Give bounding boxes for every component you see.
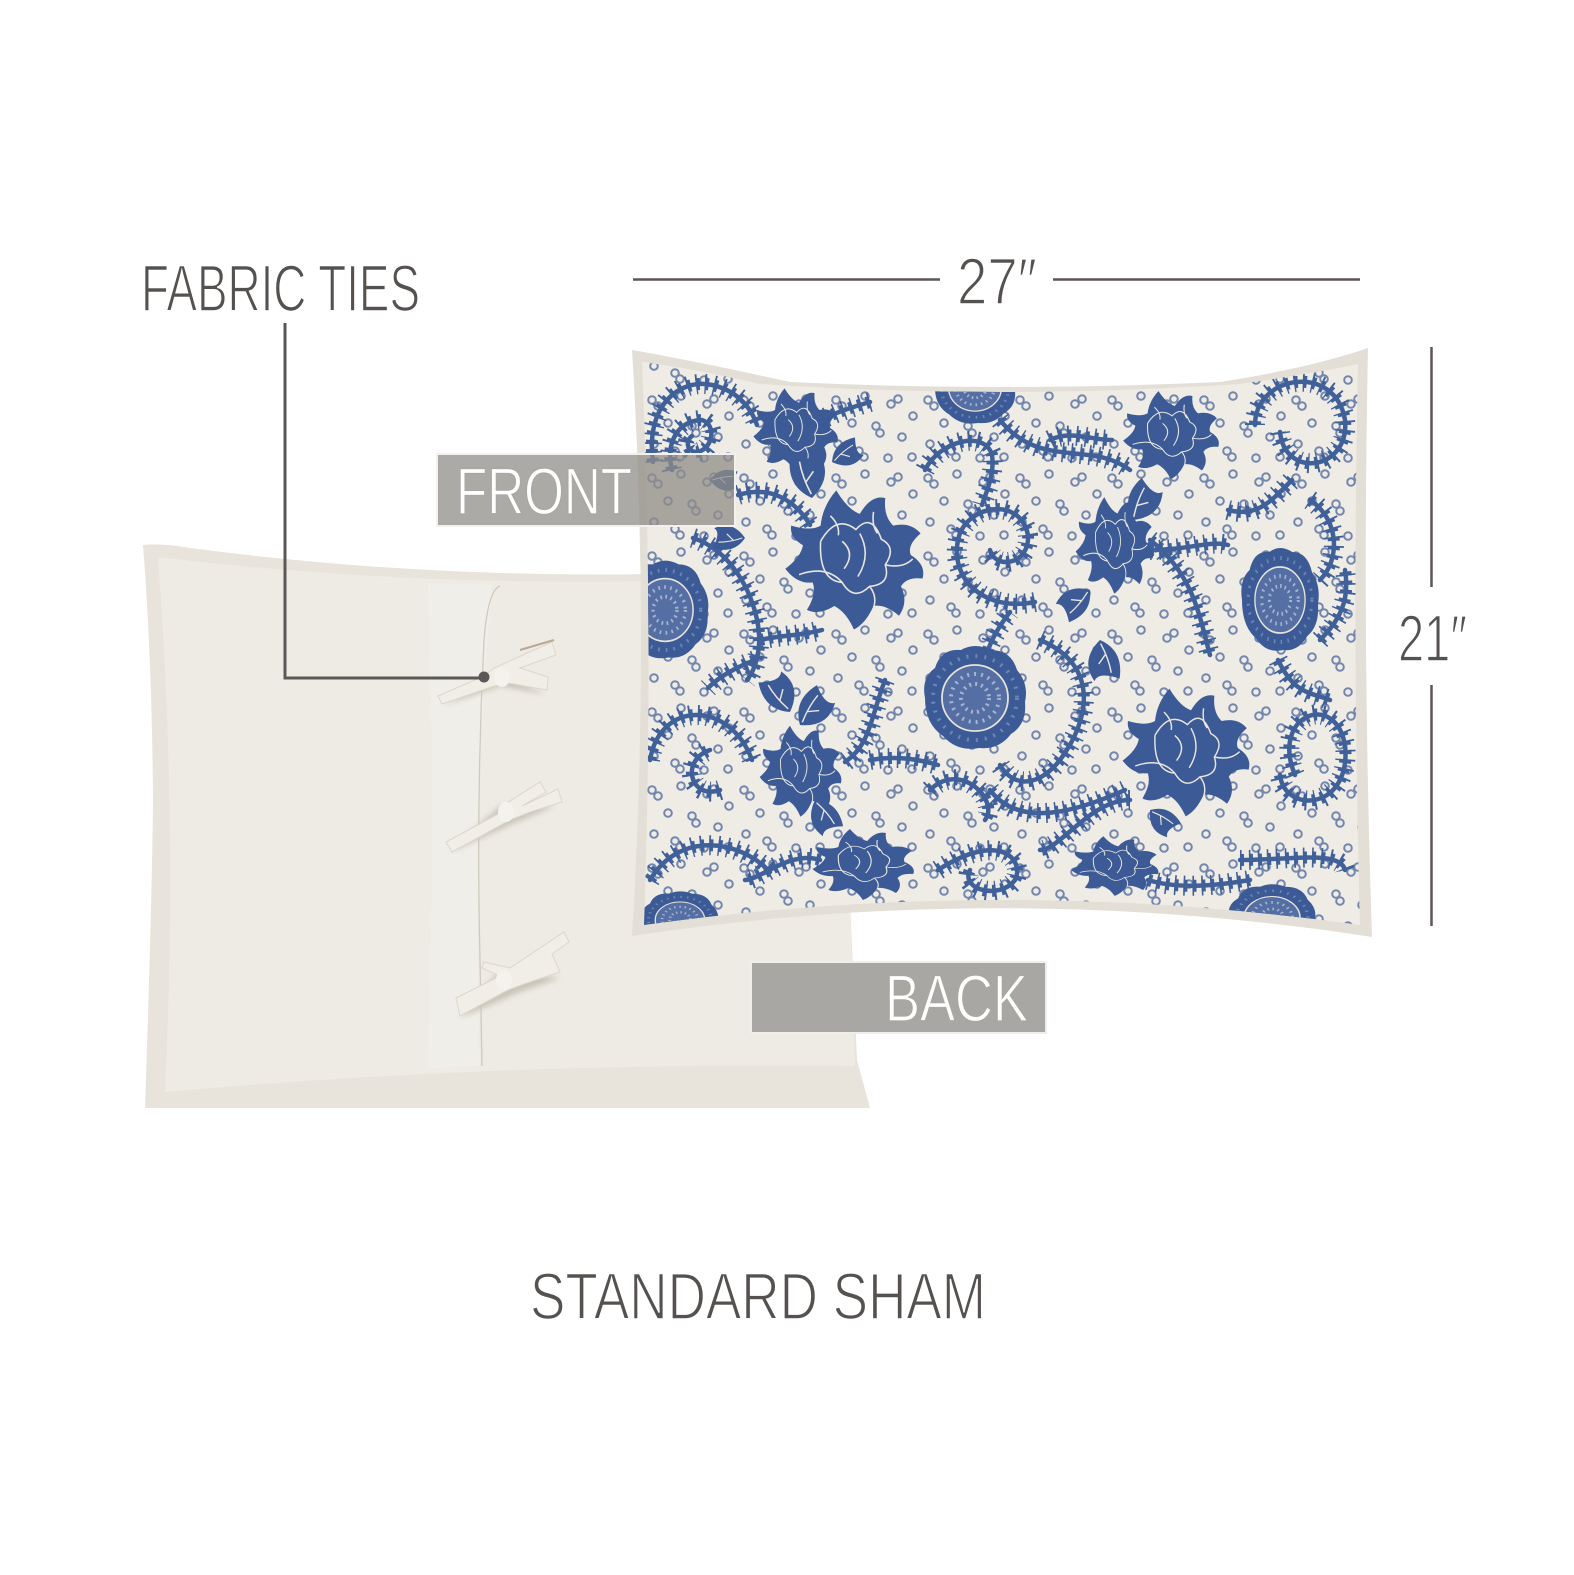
callout: fabric ties: [141, 251, 490, 682]
fabric tie top: [438, 640, 556, 706]
placket seam: [479, 586, 500, 1066]
floral print field: [642, 362, 1360, 925]
fabric tie middle: [446, 782, 562, 852]
back pillow: [143, 544, 870, 1108]
dimension: width 27 inches: 27″: [957, 244, 1037, 318]
label: back: BACK: [885, 961, 1028, 1035]
back pillow panel: [158, 557, 855, 1092]
front pillow border: [632, 348, 1372, 937]
round flowers: [644, 391, 1319, 925]
blue roses: [753, 388, 1249, 900]
fabric tie bottom: [456, 932, 569, 1018]
front pillow: [622, 348, 1375, 951]
back pillow body: [143, 544, 870, 1108]
label: back: [751, 961, 1046, 1035]
title: STANDARD SHAM: [530, 1259, 986, 1333]
dimension: height 21 inches: 21″: [1398, 601, 1467, 675]
thorned vines: [650, 382, 1346, 891]
leaves: [710, 436, 1182, 840]
callout: fabric ties: FABRIC TIES: [141, 251, 420, 325]
back placket: [428, 584, 492, 1068]
label: front: FRONT: [456, 454, 632, 528]
